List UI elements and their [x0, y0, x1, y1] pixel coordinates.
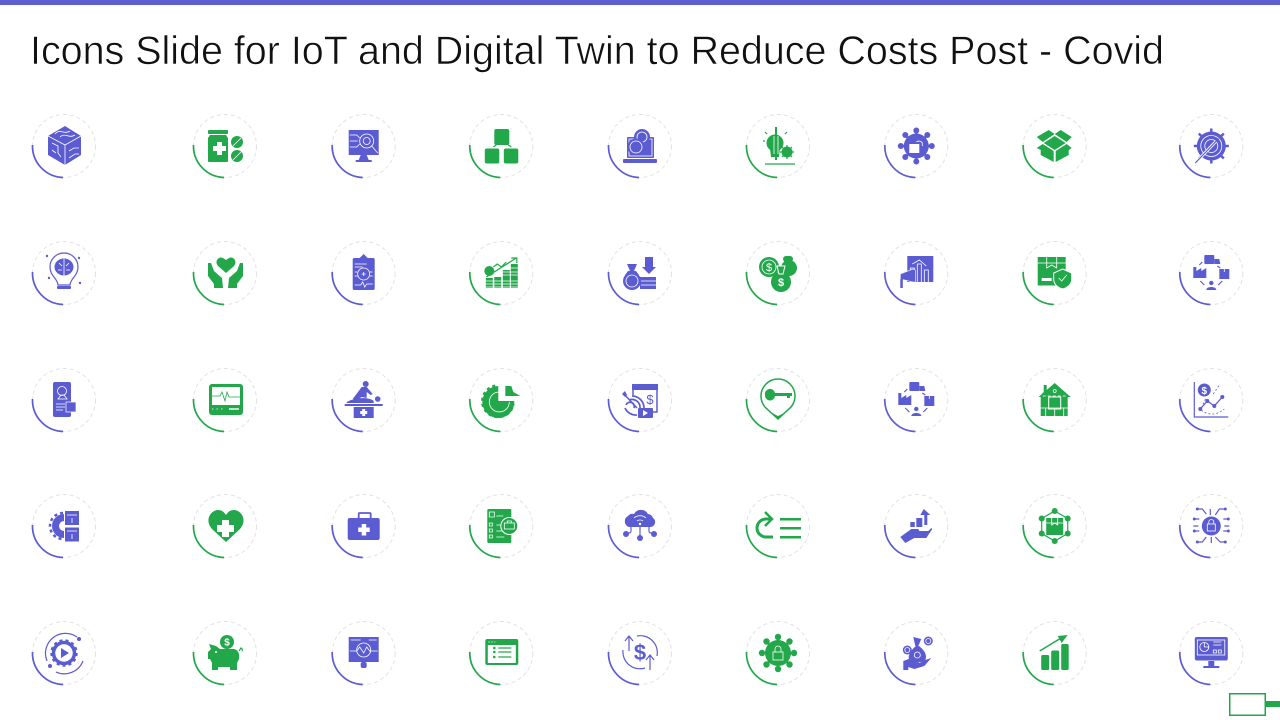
ring	[1180, 114, 1243, 178]
ring	[1180, 494, 1243, 558]
glyph: finance line chart: $	[1202, 386, 1208, 397]
glyph: hands holding heart	[208, 258, 243, 288]
ring	[885, 242, 948, 304]
glyph: key location pin	[761, 379, 795, 419]
ring	[193, 368, 256, 432]
tile: supply chain cycle	[1180, 242, 1243, 304]
glyph: phone certificate	[53, 382, 76, 417]
ring	[193, 242, 256, 304]
ring	[470, 242, 533, 304]
glyph: growth money chart	[484, 258, 519, 288]
glyph: piggy bank: $	[224, 638, 230, 648]
tile: laptop gears	[608, 114, 672, 178]
glyph: monitor gear search	[349, 130, 379, 162]
glyph: browser analytics bulb	[349, 637, 379, 668]
tile: phone certificate	[32, 368, 96, 432]
tile: pill bottle	[193, 114, 256, 178]
tile: reload list	[746, 494, 810, 558]
glyph: reload list	[757, 512, 801, 538]
tile: circuit cube	[32, 114, 96, 178]
ring	[470, 622, 533, 684]
tile: box network	[1023, 494, 1086, 558]
ring	[885, 368, 948, 432]
tile: gear boxes	[32, 494, 96, 558]
ring	[608, 114, 672, 178]
tile: key location pin	[746, 368, 810, 432]
tile: heart cross	[193, 494, 256, 558]
glyph: bulb pencil virus	[763, 127, 795, 164]
tile: hierarchy blocks	[470, 114, 533, 178]
glyph: box network	[1039, 508, 1071, 544]
tile: megaphone chart	[885, 242, 948, 304]
tile: monitor gear search	[332, 114, 395, 178]
ring	[746, 242, 810, 304]
tile: massage table	[332, 368, 395, 432]
tile: dollar cycle	[608, 622, 672, 684]
glyph: money bag reduction	[623, 257, 656, 290]
tile: medical kit	[332, 494, 395, 558]
tile: finance line chart	[1180, 368, 1243, 432]
ring	[1023, 368, 1086, 432]
ring	[746, 114, 810, 178]
tile: bulb pencil virus	[746, 114, 810, 178]
ring	[885, 114, 948, 178]
glyph: hand money bag	[903, 636, 933, 670]
glyph: open box	[1037, 130, 1072, 162]
ring	[608, 368, 672, 432]
ring	[332, 242, 395, 304]
tile: browser analytics bulb	[332, 622, 395, 684]
ring	[1180, 242, 1243, 304]
tile: hand growth chart	[885, 494, 948, 558]
icon grid	[32, 114, 1243, 684]
tile: warehouse	[1023, 368, 1086, 432]
glyph: circuit cube	[48, 126, 81, 165]
ring	[32, 622, 96, 684]
glyph: virus lock	[759, 634, 797, 672]
glyph: browser list	[485, 639, 518, 665]
tile: gear play orbit	[32, 622, 96, 684]
tile: dashboard monitor	[1180, 622, 1243, 684]
ring	[885, 494, 948, 558]
tile: hand money bag	[885, 622, 948, 684]
ring	[332, 494, 395, 558]
ring	[1023, 622, 1086, 684]
glyph: megaphone chart	[900, 256, 933, 288]
glyph: supply chain cycle	[1193, 255, 1229, 290]
glyph: medical kit	[348, 513, 380, 540]
glyph: gear pie chart	[482, 380, 520, 418]
ring	[1180, 368, 1243, 432]
ring	[332, 114, 395, 178]
tile: growth money chart	[470, 242, 533, 304]
page number box	[1230, 694, 1265, 715]
glyph: coins and bags: $	[778, 277, 784, 289]
glyph: dashboard monitor	[1195, 637, 1228, 668]
tile: brain bulb	[32, 242, 96, 304]
ring	[32, 368, 96, 432]
tile: piggy bank	[193, 622, 256, 684]
ring	[193, 114, 256, 178]
ring	[1023, 114, 1086, 178]
tile: browser list	[470, 622, 533, 684]
tile: heart rate monitor	[193, 368, 256, 432]
ring	[746, 622, 810, 684]
glyph: brain bulb	[46, 253, 81, 289]
ring	[608, 494, 672, 558]
tile: coins and bags	[746, 242, 810, 304]
glyph: clipboard medical	[353, 254, 375, 290]
ring	[332, 368, 395, 432]
ring	[32, 114, 96, 178]
glyph: coins and bags	[759, 256, 797, 292]
ring	[1023, 494, 1086, 558]
glyph: coins and bags: $	[766, 262, 772, 274]
glyph: hierarchy blocks	[485, 129, 518, 164]
ring	[32, 242, 96, 304]
glyph: heart rate monitor	[209, 384, 243, 415]
tile: hands holding heart	[193, 242, 256, 304]
ring	[746, 368, 810, 432]
glyph: lock circuit	[1193, 508, 1230, 544]
ring	[608, 622, 672, 684]
ring	[746, 494, 810, 558]
tile: checklist briefcase	[470, 494, 533, 558]
glyph: laptop gears	[623, 129, 657, 163]
glyph: gear target arrow	[1194, 128, 1229, 164]
glyph: rising bars arrow	[1040, 635, 1069, 670]
tile: rising bars arrow	[1023, 622, 1086, 684]
tile: virus lock	[746, 622, 810, 684]
page number tab	[1266, 701, 1280, 707]
glyph: massage table	[345, 381, 383, 418]
ring	[1023, 242, 1086, 304]
glyph: gear boxes	[50, 511, 79, 542]
tile: cloud network	[608, 494, 672, 558]
glyph: gear play orbit	[45, 633, 83, 674]
tile: clipboard medical	[332, 242, 395, 304]
glyph: virus with square	[898, 128, 935, 164]
tile: gear target arrow	[1180, 114, 1243, 178]
tile: open box	[1023, 114, 1086, 178]
ring	[885, 622, 948, 684]
glyph: package shield	[1038, 257, 1072, 289]
ring	[470, 114, 533, 178]
tile: money bag reduction	[608, 242, 672, 304]
glyph: dollar cycle: $	[634, 640, 646, 665]
tile: supply chain cycle	[885, 368, 948, 432]
glyph: heart cross	[208, 510, 244, 542]
glyph: supply chain cycle	[898, 382, 934, 416]
glyph: target marketing video: $	[646, 392, 654, 407]
glyph: cloud network	[623, 510, 657, 541]
ring	[470, 494, 533, 558]
tile: package shield	[1023, 242, 1086, 304]
tile: virus with square	[885, 114, 948, 178]
top accent bar	[0, 0, 1280, 5]
tile: lock circuit	[1180, 494, 1243, 558]
ring	[193, 494, 256, 558]
tile: target marketing video	[608, 368, 672, 432]
ring	[608, 242, 672, 304]
glyph: pill bottle	[208, 130, 243, 162]
ring	[193, 622, 256, 684]
ring	[1180, 622, 1243, 684]
ring	[470, 368, 533, 432]
glyph: checklist briefcase	[487, 509, 518, 543]
ring	[32, 494, 96, 558]
glyph: warehouse	[1039, 383, 1071, 416]
ring	[332, 622, 395, 684]
glyph: hand growth chart	[900, 509, 932, 543]
title: Icons Slide for IoT and Digital Twin to Reduce Costs Post - Covid	[30, 29, 1164, 73]
tile: gear pie chart	[470, 368, 533, 432]
